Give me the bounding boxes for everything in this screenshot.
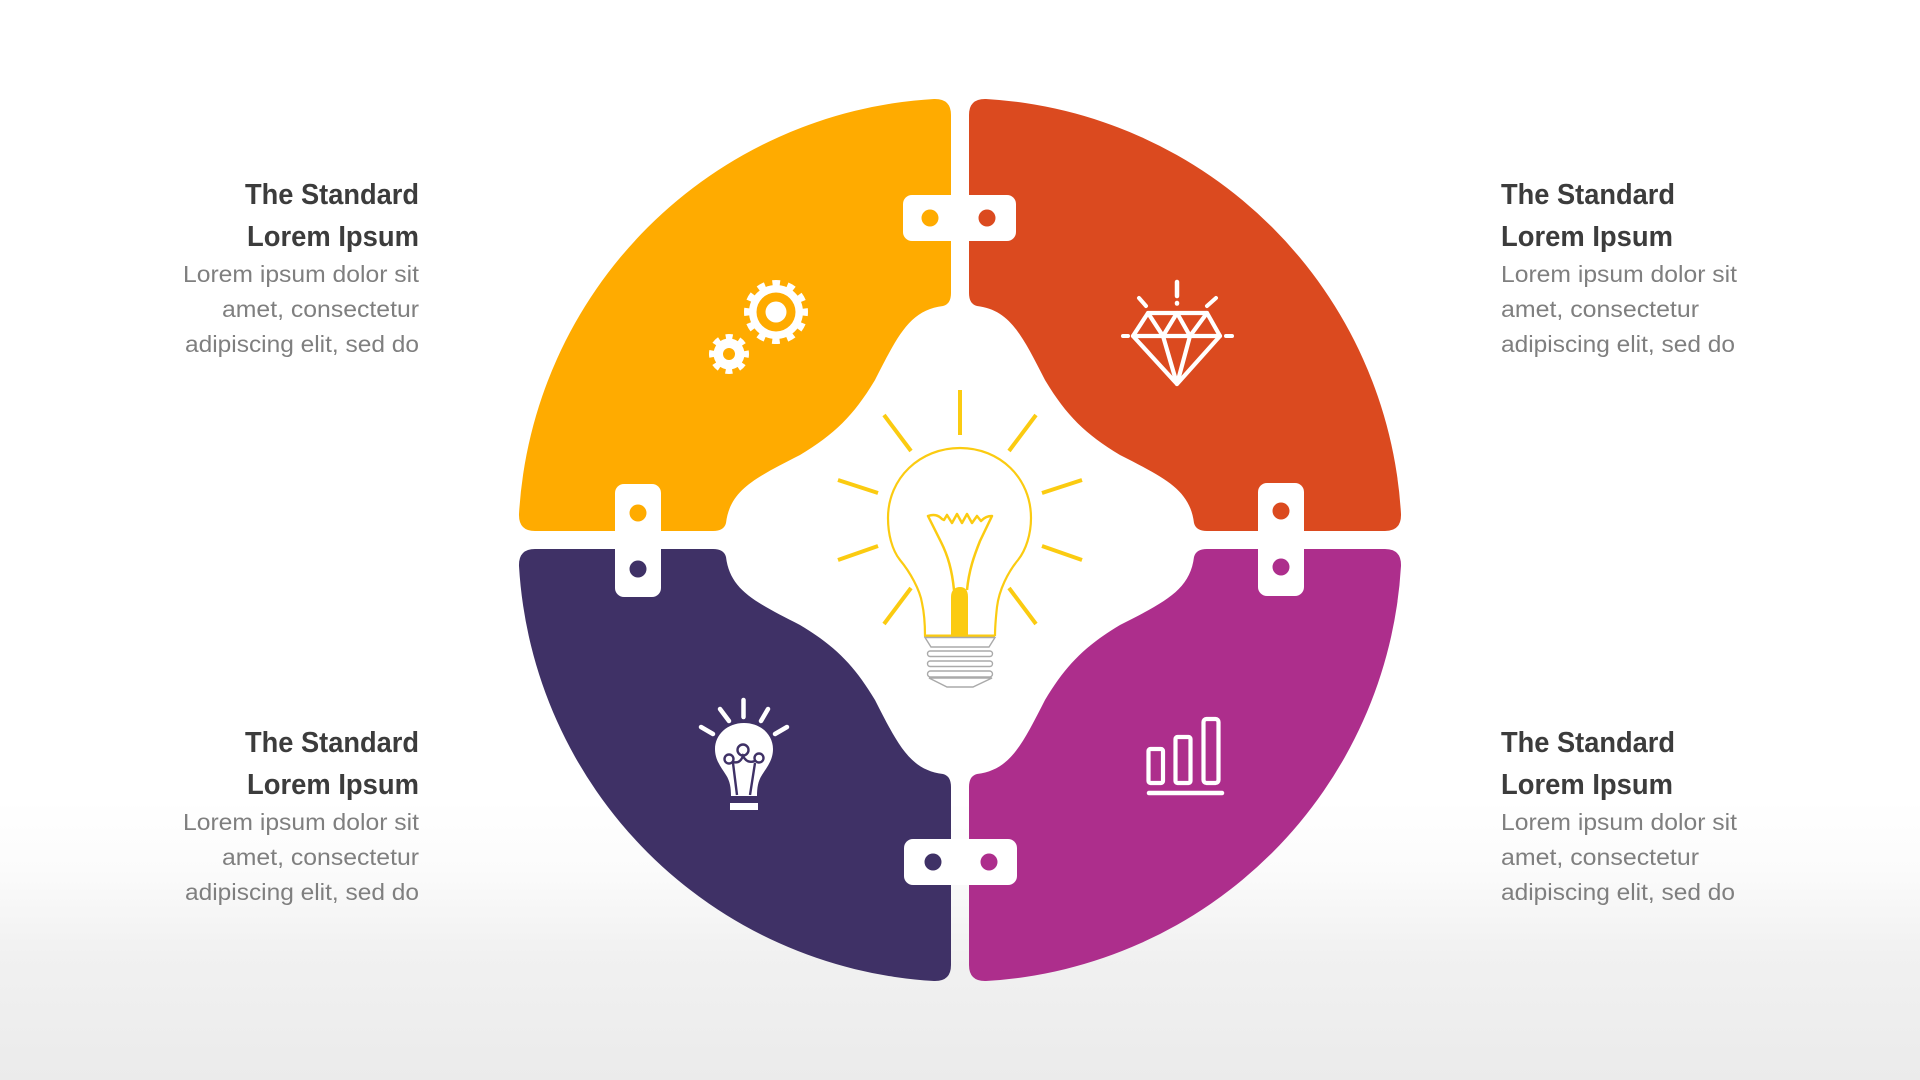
text block: top-left: The Standard: [245, 179, 419, 211]
panel: bottom-right magenta quadrant: [969, 549, 1401, 981]
bulb glass outline: [888, 448, 1031, 636]
bulb post: [951, 587, 968, 636]
text block: top-left: adipiscing elit, sed do: [185, 331, 419, 357]
text block: top-left: [183, 179, 420, 357]
connector: left tab: [615, 484, 661, 597]
text block: bottom-left: The Standard: [245, 727, 419, 759]
text block: bottom-left: amet, consectetur: [222, 844, 419, 870]
connector: bottom tab: [904, 839, 1017, 885]
text block: top-right: Lorem Ipsum: [1501, 221, 1673, 253]
text block: bottom-left: [183, 727, 420, 905]
bulb collar line: [924, 634, 995, 638]
text block: bottom-right: Lorem Ipsum: [1501, 769, 1673, 801]
text block: top-right: Lorem ipsum dolor sit: [1501, 261, 1738, 287]
text block: top-left: Lorem ipsum dolor sit: [183, 261, 420, 287]
text block: top-right: amet, consectetur: [1501, 296, 1699, 322]
illustration: central light bulb: [838, 390, 1082, 687]
connector: right tab: [1258, 483, 1304, 596]
text block: bottom-left: Lorem ipsum dolor sit: [183, 809, 420, 835]
icon: small light bulb: [701, 700, 787, 810]
bulb screw base: [925, 638, 995, 687]
text block: bottom-right: The Standard: [1501, 727, 1675, 759]
connector: top tab: [903, 195, 1016, 241]
text block: top-left: amet, consectetur: [222, 296, 419, 322]
text block: bottom-right: amet, consectetur: [1501, 844, 1699, 870]
panel: bottom-left purple quadrant: [519, 549, 951, 981]
text block: top-left: Lorem Ipsum: [247, 221, 419, 253]
text block: bottom-right: [1501, 727, 1738, 905]
text block: top-right: [1501, 179, 1738, 357]
icon: gears: [712, 284, 804, 371]
text block: top-right: The Standard: [1501, 179, 1675, 211]
text block: bottom-left: Lorem Ipsum: [247, 769, 419, 801]
bulb rays: [838, 390, 1082, 624]
panel: top-right orange quadrant: [969, 99, 1401, 531]
bulb filament: [928, 514, 992, 590]
icon: diamond: [1123, 282, 1232, 384]
text block: bottom-left: adipiscing elit, sed do: [185, 879, 419, 905]
panel: top-left yellow quadrant: [519, 99, 951, 531]
text block: bottom-right: adipiscing elit, sed do: [1501, 879, 1735, 905]
text block: bottom-right: Lorem ipsum dolor sit: [1501, 809, 1738, 835]
icon: bar chart: [1148, 719, 1222, 793]
text block: top-right: adipiscing elit, sed do: [1501, 331, 1735, 357]
